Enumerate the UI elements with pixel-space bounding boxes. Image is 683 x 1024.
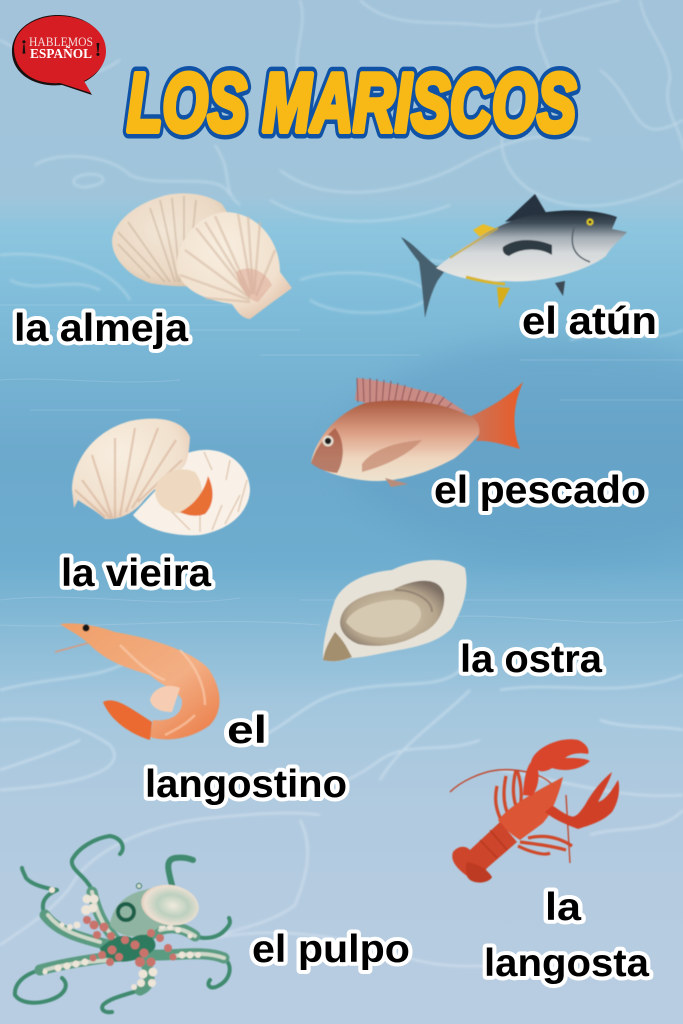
label: el atún: el atún	[522, 300, 657, 343]
label: la langosta	[484, 886, 649, 985]
logo: Hablemos Español speech bubble: ESPAÑOL	[30, 46, 92, 61]
icon: la almeja shells	[112, 193, 292, 319]
label: el langostino	[145, 709, 347, 806]
label: la langosta: la	[545, 886, 581, 929]
logo: Hablemos Español speech bubble	[12, 15, 106, 95]
label: la langosta: langosta	[484, 942, 649, 985]
label: la almeja: la almeja	[14, 307, 188, 350]
label: el langostino: langostino	[145, 763, 347, 806]
label: el pescado: el pescado	[434, 469, 646, 512]
icon: el pescado red snapper	[311, 378, 523, 487]
icon: la ostra oyster	[323, 560, 467, 661]
icon: la vieira scallop	[72, 419, 250, 535]
label: la ostra: la ostra	[460, 638, 602, 681]
icon: la langosta lobster	[450, 739, 619, 883]
icon: el pulpo octopus	[15, 836, 230, 1012]
label: la vieira: la vieira	[61, 552, 211, 595]
logo: Hablemos Español speech bubble: HABLEMOS	[29, 35, 93, 49]
logo: Hablemos Español speech bubble: !	[95, 39, 101, 61]
label: el pulpo: el pulpo	[252, 928, 410, 971]
logo: Hablemos Español speech bubble: ¡	[21, 33, 27, 55]
icon: el langostino shrimp	[55, 623, 220, 740]
icon: el atún tuna	[401, 194, 627, 318]
label: el langostino: el	[227, 709, 267, 752]
